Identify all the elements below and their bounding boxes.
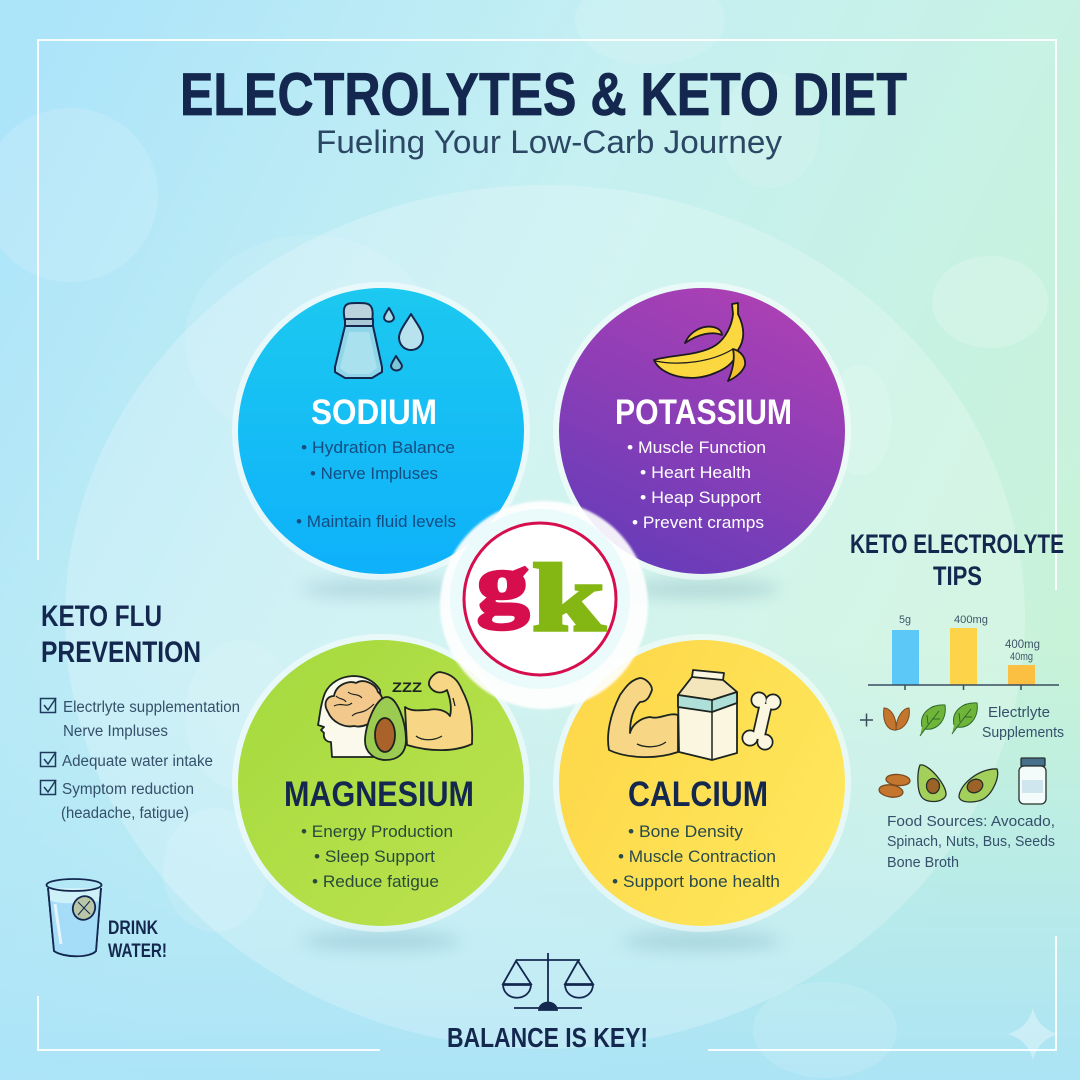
heading: magnesium: MAGNESIUM — [284, 775, 474, 814]
checklist: Adequate water intake — [62, 753, 213, 770]
panel: keto flu prevention — [40, 600, 240, 962]
heading: keto electrolyte tips: TIPS — [933, 561, 982, 591]
magnesium bullet list: • Reduce fatigue — [312, 873, 439, 891]
checklist: (headache, fatigue) — [61, 805, 189, 822]
callout: drink water — [108, 918, 167, 962]
sodium bullet list: • Nerve Impluses — [310, 465, 438, 483]
checklist: Electrlyte supplementation — [63, 699, 240, 716]
icon: brain, avocado and flexed arm — [318, 672, 472, 760]
heading: keto flu prevention — [41, 600, 201, 669]
icon row: almond, spinach and supplements: Electrlyte — [988, 705, 1050, 721]
bar chart: 40mg — [1010, 651, 1033, 663]
food sources text — [887, 814, 1055, 871]
title: ELECTROLYTES & KETO DIET — [180, 61, 907, 128]
callout: drink water: DRINK — [108, 918, 158, 939]
icon: glass of water — [46, 879, 102, 956]
panel: sodium — [232, 282, 530, 598]
bar chart: 400mg — [954, 614, 988, 626]
icon row: almonds, avocados and bottle — [878, 758, 1046, 804]
heading: calcium: CALCIUM — [628, 775, 768, 814]
checklist: Symptom reduction — [62, 781, 194, 798]
panel: potassium — [553, 282, 851, 598]
icon row: almond, spinach and supplements — [860, 703, 1064, 741]
heading: keto electrolyte tips — [850, 529, 1064, 591]
potassium bullet list — [627, 439, 766, 532]
icon: balance scale — [503, 953, 593, 1010]
heading: potassium: POTASSIUM — [615, 393, 792, 432]
bar chart: 400mg — [1005, 637, 1040, 651]
checklist — [40, 698, 240, 822]
heading: sodium: SODIUM — [311, 393, 437, 432]
subtitle: Fueling Your Low-Carb Journey — [316, 124, 782, 160]
calcium bullet list: • Bone Density — [628, 823, 744, 841]
panel: keto electrolyte tips — [850, 529, 1064, 871]
calcium bullet list: • Muscle Contraction — [618, 848, 776, 866]
heading: keto flu prevention: KETO FLU — [41, 600, 162, 633]
icon: zzz: ZZZ — [392, 679, 423, 695]
center logo: gk — [440, 501, 648, 709]
food sources text: Bone Broth — [887, 855, 959, 871]
sodium bullet list: • Hydration Balance — [301, 439, 455, 457]
bar chart — [868, 614, 1059, 690]
calcium bullet list — [612, 823, 780, 891]
icon: arm, milk carton and bone — [608, 670, 737, 760]
icon: banana — [654, 303, 745, 381]
calcium bullet list: • Support bone health — [612, 873, 780, 891]
heading: balance is key: BALANCE IS KEY! — [447, 1022, 648, 1053]
icon: salt shaker and drops — [335, 303, 423, 378]
checklist: Nerve Impluses — [63, 723, 168, 740]
sodium bullet list — [296, 439, 456, 531]
panel: calcium — [553, 634, 851, 950]
potassium bullet list: • Prevent cramps — [632, 514, 764, 532]
magnesium bullet list — [301, 823, 453, 891]
icon row: almond, spinach and supplements: Supplements — [982, 725, 1064, 741]
sodium bullet list: • Maintain fluid levels — [296, 513, 456, 531]
icon: bone — [742, 692, 782, 750]
callout: drink water: WATER! — [108, 941, 167, 962]
center logo: gk: g — [477, 537, 529, 630]
food sources text: Spinach, Nuts, Bus, Seeds — [887, 834, 1055, 850]
potassium bullet list: • Muscle Function — [627, 439, 766, 457]
potassium bullet list: • Heap Support — [640, 489, 761, 507]
heading: keto flu prevention: PREVENTION — [41, 636, 201, 669]
center logo: gk: k — [532, 544, 606, 651]
potassium bullet list: • Heart Health — [640, 464, 751, 482]
panel: magnesium — [232, 634, 530, 950]
magnesium bullet list: • Energy Production — [301, 823, 453, 841]
sparkle — [1008, 1008, 1058, 1060]
food sources text: Food Sources: Avocado, — [887, 814, 1055, 830]
bar chart: 5g — [899, 614, 911, 626]
magnesium bullet list: • Sleep Support — [314, 848, 435, 866]
panel: balance is key — [447, 953, 648, 1053]
